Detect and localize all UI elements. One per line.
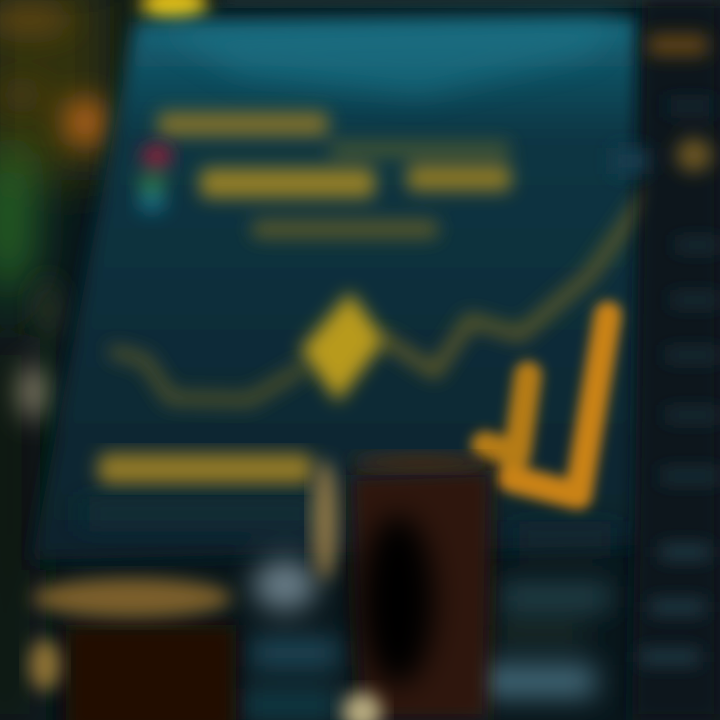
top edge light xyxy=(220,0,720,4)
left edge foliage xyxy=(0,0,110,720)
orange arrow chart xyxy=(485,315,608,496)
board top glow xyxy=(160,18,620,95)
diamond marker xyxy=(300,292,385,402)
line chart xyxy=(115,155,700,400)
lamp glow xyxy=(140,0,208,22)
caption: blurred yellow line xyxy=(98,453,313,485)
left edge highlights xyxy=(0,6,107,420)
cup: left xyxy=(29,578,236,720)
right column xyxy=(612,0,720,720)
cup: center xyxy=(312,454,492,720)
heading: blurred title lines xyxy=(158,112,511,238)
legend: colored markers xyxy=(137,145,173,212)
right column marks xyxy=(612,34,720,664)
lower text rows xyxy=(80,505,620,720)
panel: chart board xyxy=(32,18,640,560)
